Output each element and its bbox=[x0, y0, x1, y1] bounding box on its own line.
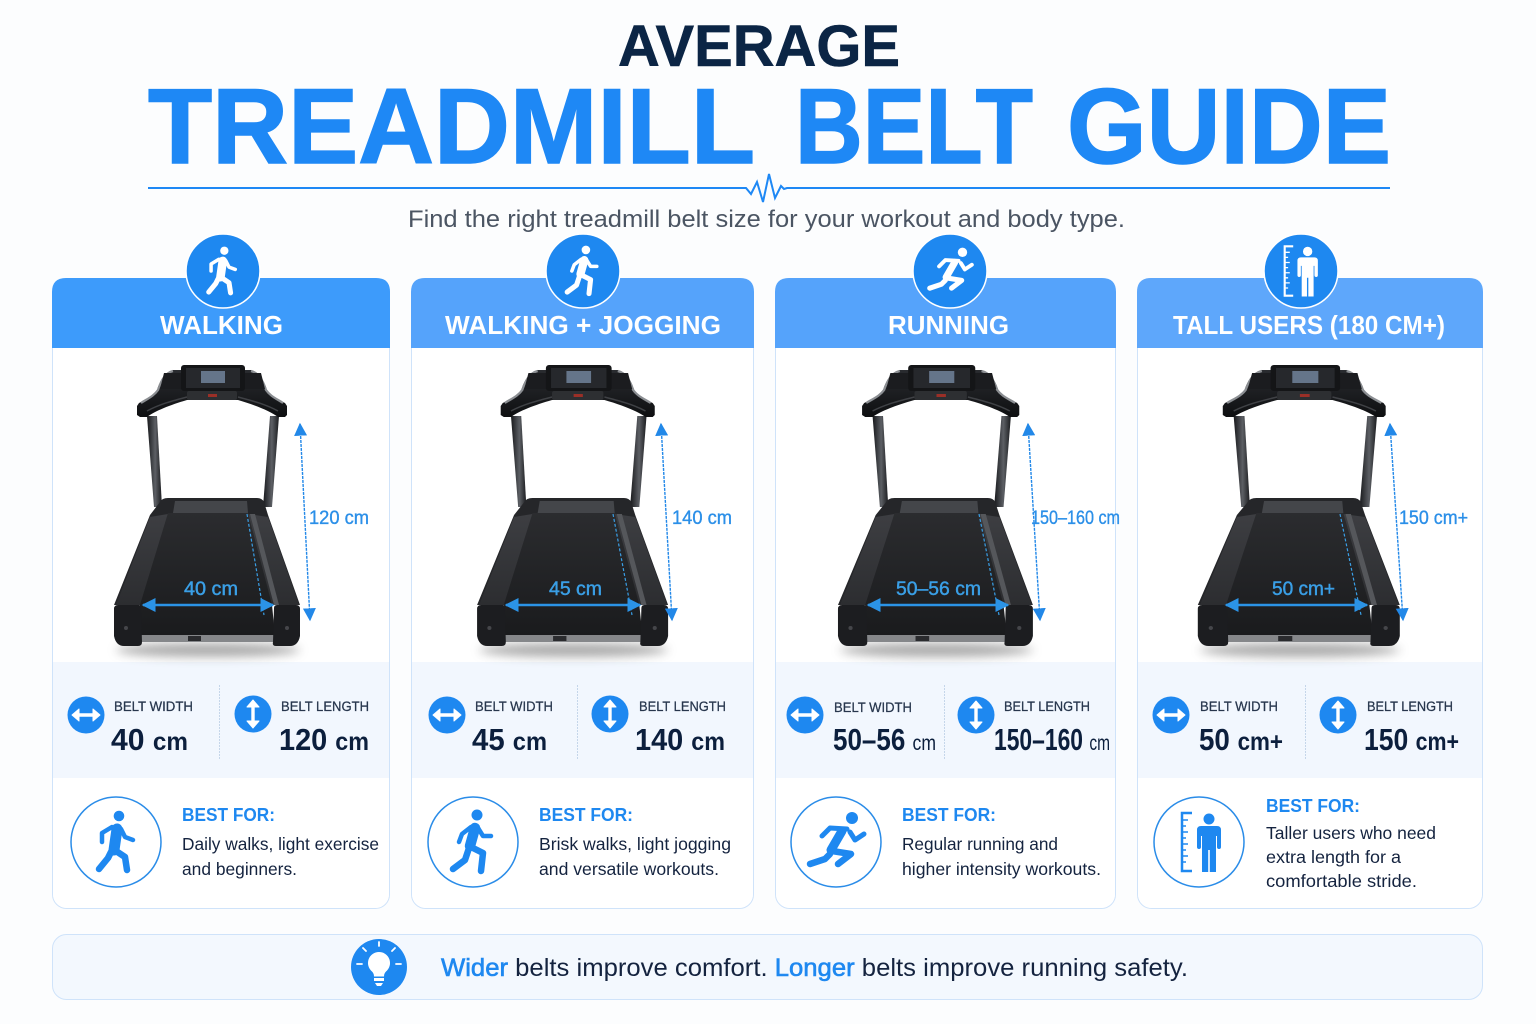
belt length stat bbox=[958, 696, 1110, 757]
best for card: BEST FOR: bbox=[182, 804, 275, 825]
header label: TALL USERS (180 CM+) bbox=[1173, 310, 1445, 340]
belt width stat bbox=[428, 696, 553, 757]
length arrow bbox=[1028, 424, 1120, 620]
title: treadmill belt guide: TREADMILL bbox=[148, 66, 755, 186]
best for card: BEST FOR: bbox=[539, 804, 633, 825]
width arrow bbox=[868, 514, 1008, 615]
best for card: and beginners. bbox=[182, 859, 297, 879]
length arrow: 140 cm bbox=[672, 508, 732, 529]
tip text: Wider belts improve comfort. Longer belts improve running safety. bbox=[441, 954, 1188, 982]
belt width stat: 50–56 cm bbox=[833, 722, 936, 757]
belt length stat: BELT LENGTH bbox=[639, 699, 726, 714]
length arrow bbox=[1390, 424, 1468, 620]
panel: walking + jogging bbox=[411, 234, 754, 908]
belt width stat: BELT WIDTH bbox=[475, 699, 553, 714]
heartbeat divider bbox=[148, 174, 1390, 202]
belt length stat bbox=[1320, 696, 1459, 757]
title: treadmill belt guide: BELT bbox=[795, 66, 1033, 186]
width arrow bbox=[506, 514, 640, 615]
belt width stat: BELT WIDTH bbox=[834, 700, 912, 715]
title: treadmill belt guide: GUIDE bbox=[1067, 66, 1391, 186]
header icon bbox=[186, 234, 260, 308]
length arrow bbox=[661, 424, 732, 620]
header label: RUNNING bbox=[888, 310, 1009, 340]
header icon bbox=[1264, 234, 1338, 308]
belt width stat: 40 cm bbox=[111, 722, 188, 757]
width arrow bbox=[1226, 514, 1367, 615]
width arrow: 50 cm+ bbox=[1272, 579, 1335, 600]
belt width stat: 45 cm bbox=[472, 722, 547, 757]
treadmill image bbox=[838, 365, 1033, 657]
width arrow: 45 cm bbox=[549, 579, 602, 600]
best for card bbox=[776, 778, 1115, 908]
belt length stat bbox=[592, 696, 726, 757]
best for card bbox=[1138, 778, 1482, 908]
icon: light bulb bbox=[351, 939, 407, 995]
belt length stat: 150–160 cm bbox=[994, 722, 1110, 757]
best for card: and versatile workouts. bbox=[539, 859, 719, 879]
width arrow: 40 cm bbox=[184, 579, 238, 600]
header label: WALKING bbox=[160, 310, 283, 340]
belt width stat: BELT WIDTH bbox=[1200, 699, 1278, 714]
title: treadmill belt guide bbox=[148, 66, 1391, 186]
belt width stat bbox=[786, 696, 936, 757]
panel: walking bbox=[52, 234, 390, 908]
best for card: Daily walks, light exercise bbox=[182, 834, 379, 854]
length arrow: 120 cm bbox=[309, 508, 369, 529]
best for card: comfortable stride. bbox=[1266, 871, 1417, 891]
treadmill image bbox=[1198, 365, 1400, 657]
best for card bbox=[412, 778, 753, 908]
belt length stat: BELT LENGTH bbox=[1367, 699, 1453, 714]
best for card: Brisk walks, light jogging bbox=[539, 834, 731, 854]
best for card: higher intensity workouts. bbox=[902, 859, 1101, 879]
header icon bbox=[913, 234, 987, 308]
belt length stat: BELT LENGTH bbox=[1004, 699, 1090, 714]
panel: tall users bbox=[1137, 234, 1483, 908]
belt length stat: 150 cm+ bbox=[1364, 722, 1459, 757]
best for card: Regular running and bbox=[902, 834, 1058, 854]
footer tip bar bbox=[52, 934, 1482, 1000]
belt width stat bbox=[68, 696, 193, 757]
panel: running bbox=[775, 234, 1120, 908]
best for card bbox=[53, 778, 389, 908]
title: average: AVERAGE bbox=[618, 14, 900, 79]
best for card: Taller users who need bbox=[1266, 823, 1436, 843]
best for card: BEST FOR: bbox=[1266, 795, 1360, 816]
belt width stat bbox=[1152, 696, 1283, 757]
best for card: BEST FOR: bbox=[902, 804, 996, 825]
belt length stat: 120 cm bbox=[279, 722, 369, 757]
treadmill image bbox=[114, 365, 300, 657]
belt length stat: BELT LENGTH bbox=[281, 699, 369, 714]
length arrow: 150–160 cm bbox=[1031, 508, 1120, 529]
width arrow bbox=[143, 514, 273, 615]
best for card: extra length for a bbox=[1266, 847, 1401, 867]
belt width stat: BELT WIDTH bbox=[114, 699, 193, 714]
belt length stat bbox=[234, 696, 369, 757]
header label: WALKING + JOGGING bbox=[445, 310, 721, 340]
width arrow: 50–56 cm bbox=[896, 579, 981, 600]
length arrow bbox=[300, 424, 369, 620]
subtitle: Find the right treadmill belt size for your workout and body type. bbox=[408, 206, 1125, 233]
length arrow: 150 cm+ bbox=[1399, 508, 1468, 529]
belt width stat: 50 cm+ bbox=[1199, 722, 1283, 757]
header icon bbox=[546, 234, 620, 308]
treadmill image bbox=[477, 365, 668, 657]
belt length stat: 140 cm bbox=[635, 722, 725, 757]
